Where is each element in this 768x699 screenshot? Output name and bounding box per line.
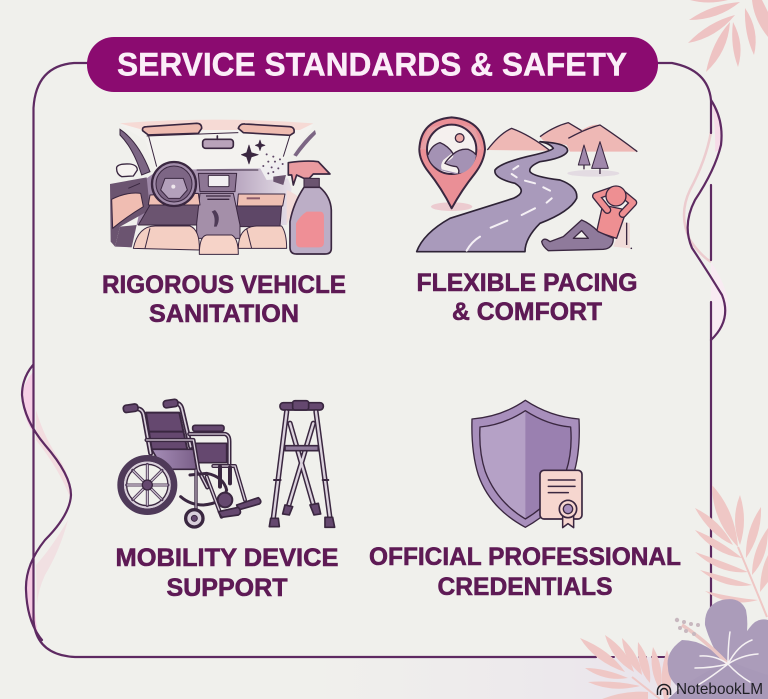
title banner <box>87 37 658 92</box>
label: rigorous vehicle sanitation: SANITATION <box>149 300 299 328</box>
label: flexible pacing and comfort: & COMFORT <box>452 298 602 326</box>
decoration: bottom right palm frond <box>695 485 768 617</box>
certificate <box>540 470 582 528</box>
label: rigorous vehicle sanitation: RIGOROUS VEHICLE <box>102 271 346 299</box>
icon: shield with certificate <box>472 400 582 528</box>
icon: car interior with spray bottle <box>110 120 331 254</box>
icon: location pin, winding road and resting person <box>417 117 637 252</box>
panel frame <box>22 63 725 657</box>
label: mobility device support: SUPPORT <box>166 574 288 602</box>
walker <box>269 401 335 527</box>
decoration: top right palm frond <box>688 0 768 72</box>
label: mobility device support: MOBILITY DEVICE <box>116 544 338 572</box>
wheelchair <box>121 399 261 527</box>
label: official professional credentials: OFFICIAL PROFESSIONAL <box>369 543 681 571</box>
dashboard <box>137 168 292 225</box>
decoration: bottom lilac corner wash <box>300 657 768 699</box>
icon: hibiscus flower <box>668 599 768 699</box>
icon: wheelchair and walker <box>121 399 335 527</box>
sparkles <box>241 145 258 164</box>
resting person <box>542 186 633 251</box>
shield <box>472 400 579 527</box>
label: official professional credentials <box>369 543 681 601</box>
label: official professional credentials: CREDENTIALS <box>438 573 612 601</box>
label: rigorous vehicle sanitation <box>102 271 346 328</box>
title: SERVICE STANDARDS & SAFETY <box>117 46 627 82</box>
decoration: bottom palm frond <box>580 635 671 699</box>
decoration: frame pink under-waves <box>22 100 728 635</box>
label: mobility device support <box>116 544 338 602</box>
watermark: NotebookLM: NotebookLM <box>676 681 763 698</box>
label: flexible pacing and comfort <box>416 269 638 326</box>
label: flexible pacing and comfort: FLEXIBLE PACING <box>416 269 638 297</box>
